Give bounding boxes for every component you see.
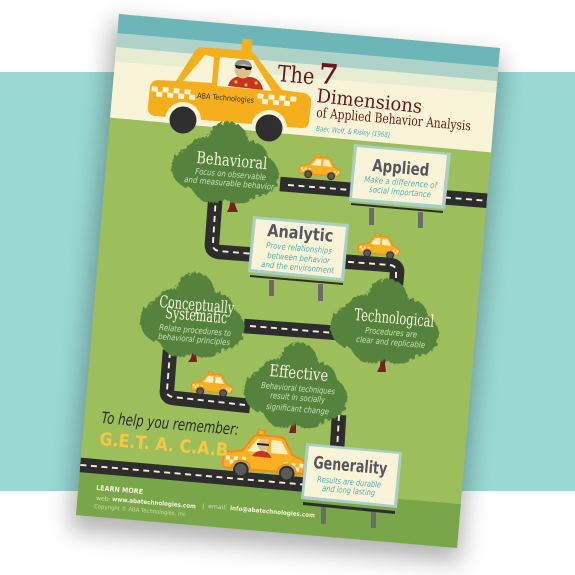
footer contact text: email: [208, 503, 227, 512]
mnemonic heading: To help you remember: [101, 408, 240, 439]
tree: conceptually systematic [137, 268, 249, 362]
text: applied: Applied [372, 156, 430, 181]
billboard: analytic [248, 216, 349, 301]
text: effective: Behavioral techniques [261, 380, 336, 396]
header stripes [76, 14, 500, 548]
text: generality: Results are durable [317, 474, 381, 490]
billboard: generality [301, 443, 402, 528]
text: analytic: Prove relationships [266, 240, 333, 256]
footer band [76, 472, 461, 548]
text: analytic: between behavior [267, 250, 331, 266]
text: generality [313, 453, 388, 498]
text: technological: clear and replicable [356, 334, 425, 350]
poster drop shadow [70, 22, 502, 562]
text: behavioral [184, 151, 274, 190]
text: technological: Procedures are [365, 325, 417, 340]
text: effective: result in socially [270, 390, 326, 405]
title: The [276, 61, 316, 90]
text: applied [364, 159, 438, 198]
citation: Baer, Wolf, & Risley (1968) [316, 124, 390, 139]
large taxi with driver [222, 429, 304, 480]
text: conceptually systematic: Relate procedures to [159, 322, 231, 338]
footer contact text: | [202, 503, 204, 510]
tree: technological [327, 274, 443, 372]
text: conceptually systematic [158, 292, 235, 347]
text: effective: Effective [269, 361, 329, 385]
mnemonic letters: G.E.T. A. C.A.B [99, 429, 229, 461]
taxi checker stripes [152, 86, 296, 106]
text: analytic: and the environment [261, 259, 335, 275]
footer contact text: web: [96, 495, 111, 503]
text: generality: Generality [313, 453, 388, 479]
poster [76, 14, 500, 548]
footer contact text: info@abatechnologies.com [230, 504, 315, 519]
text: conceptually systematic: Systematic [165, 303, 228, 327]
text: analytic [261, 221, 335, 275]
footer contact text: Copyright © ABA Technologies, Inc [94, 503, 186, 518]
taxi logo text: ABA Technologies [197, 91, 254, 105]
small taxi: top [299, 153, 341, 180]
text: effective [261, 361, 336, 416]
text: effective: significant change [266, 401, 329, 416]
text: behavioral: and measurable behavior [184, 174, 275, 192]
title: Dimensions [315, 85, 423, 118]
tree: effective [241, 338, 352, 433]
footer contact text: LEARN MORE [96, 484, 144, 496]
background teal band [0, 72, 575, 491]
taxi wheels [165, 102, 287, 142]
title: of Applied Behavior Analysis [316, 105, 472, 134]
text: behavioral: Focus on observable [195, 166, 266, 182]
text: conceptually systematic: behavioral principles [158, 331, 231, 347]
text: behavioral: Behavioral [196, 148, 268, 173]
text: conceptually systematic: Conceptually [159, 292, 235, 318]
text: analytic: Analytic [267, 221, 334, 247]
text: applied: Make a difference of [364, 174, 438, 190]
text: technological: Technological [354, 305, 435, 331]
title [278, 62, 470, 132]
small taxi: middle [358, 232, 400, 259]
text: generality: and long lasting [322, 483, 375, 498]
roads [70, 184, 490, 486]
small taxi: lower [191, 370, 233, 397]
tree: behavioral [169, 117, 283, 212]
taxi driver [228, 60, 263, 90]
billboard: applied [349, 144, 451, 228]
title: 7 [317, 57, 340, 92]
text: technological [354, 308, 434, 348]
text: applied: social importance [369, 184, 431, 199]
footer contact text: www.abatechnologies.com [112, 496, 196, 510]
footer contact text [94, 484, 315, 519]
header taxi illustration [148, 39, 311, 146]
